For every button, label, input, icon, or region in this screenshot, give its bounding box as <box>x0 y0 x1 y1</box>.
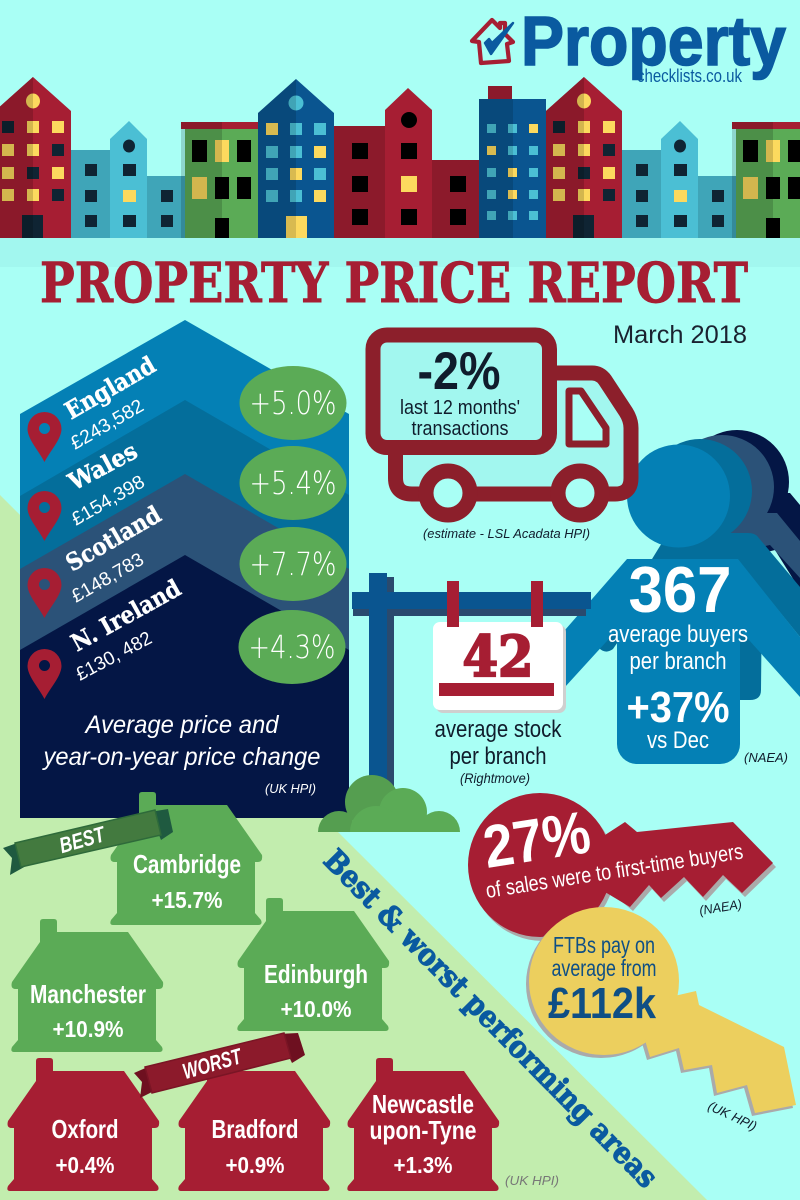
band: Scotland <box>20 474 349 700</box>
panel caption <box>42 711 321 771</box>
price: Scotland: £148,783 <box>68 549 148 607</box>
truck front wheel <box>558 471 602 515</box>
house: Cambridge <box>110 792 262 925</box>
key caption: of sales were to first-time buyers <box>484 838 745 903</box>
ribbon: WORST <box>134 1033 305 1098</box>
person 4 <box>685 430 800 590</box>
stock caption: per branch <box>450 743 546 770</box>
stock number: 42 <box>462 624 534 690</box>
ground band <box>0 238 800 267</box>
source: UK HPI key: (UK HPI) <box>706 1098 759 1134</box>
key shadow <box>471 797 776 941</box>
house: Oxford: +0.4% <box>56 1152 114 1178</box>
label: England: England <box>60 350 161 425</box>
panel caption: Average price and <box>84 711 280 739</box>
people group: average buyers <box>565 430 800 764</box>
truck stat text: -2% <box>418 342 500 401</box>
stock caption: average stock <box>434 716 562 743</box>
house: Newcastle upon-Tyne: Newcastle <box>372 1089 474 1119</box>
truck window <box>569 391 606 444</box>
house: Edinburgh: Edinburgh <box>264 959 368 989</box>
blue tower with chimney <box>479 86 546 238</box>
house: Bradford: +0.9% <box>226 1152 284 1178</box>
key shadow <box>526 910 793 1116</box>
pin: Scotland <box>28 568 62 618</box>
badge: +7.7%: +7.7% <box>250 545 336 583</box>
house: Newcastle upon-Tyne <box>347 1058 499 1191</box>
panel caption: year-on-year price change <box>42 743 321 771</box>
badge: +5.4%: +5.4% <box>250 464 336 502</box>
truck rear wheel <box>426 471 470 515</box>
buyers stat text <box>608 553 748 754</box>
house: Manchester <box>11 919 163 1052</box>
house: Newcastle upon-Tyne: upon-Tyne <box>370 1115 476 1145</box>
truck stat text: last 12 months' <box>400 397 520 419</box>
truck cab and chassis <box>396 373 631 494</box>
yellow key <box>529 907 796 1113</box>
truck stat text: transactions <box>412 418 508 440</box>
pin: N. Ireland <box>28 649 62 699</box>
green diagonal background area <box>0 495 707 1200</box>
source: UK HPI: (UK HPI) <box>265 781 316 796</box>
source: Rightmove: (Rightmove) <box>460 770 530 786</box>
badge: +7.7% <box>240 527 346 601</box>
house: Manchester: Manchester <box>30 979 146 1009</box>
key caption: FTBs pay on <box>553 932 655 958</box>
key caption <box>552 932 656 981</box>
truck box <box>373 335 550 448</box>
badge: +4.3%: +4.3% <box>248 628 336 666</box>
right group of buildings <box>546 77 800 238</box>
badge: +5.0% <box>240 366 346 440</box>
sign board <box>433 622 563 710</box>
house: Bradford: Bradford <box>212 1114 298 1144</box>
key: FTB price <box>526 907 796 1134</box>
house: Newcastle upon-Tyne: +1.3% <box>394 1152 452 1178</box>
band: England <box>20 320 349 700</box>
key caption: average from <box>552 955 656 981</box>
house: Cambridge: +15.7% <box>152 887 222 913</box>
sign post <box>352 573 591 808</box>
label: N. Ireland: N. Ireland <box>66 573 186 657</box>
buyers stat text: vs Dec <box>647 727 709 754</box>
truck stat text <box>400 342 520 440</box>
pin: Wales <box>28 491 62 541</box>
ribbon: WORST: WORST <box>180 1043 245 1084</box>
house: Bradford <box>178 1058 330 1191</box>
person 3 <box>670 435 800 578</box>
house: Cambridge: Cambridge <box>133 849 241 879</box>
house: Oxford: Oxford <box>52 1114 118 1144</box>
house: Edinburgh <box>237 898 389 1031</box>
buyers stat text: per branch <box>630 648 726 675</box>
key stat: £112k: £112k <box>548 979 656 1028</box>
left group of buildings <box>0 77 258 238</box>
sign hangers <box>447 581 543 627</box>
key stat: 27%: 27% <box>479 798 595 881</box>
key: first-time buyers share <box>468 793 776 941</box>
ribbon: BEST: BEST <box>56 821 109 858</box>
badge: +4.3% <box>238 610 346 684</box>
pin: England <box>28 412 62 462</box>
badge: +5.0%: +5.0% <box>250 384 336 422</box>
stock caption <box>434 716 562 770</box>
band: Wales <box>20 400 349 700</box>
source: estimate: (estimate - LSL Acadata HPI) <box>423 526 590 541</box>
logo <box>472 2 786 86</box>
price: N. Ireland: £130, 482 <box>72 628 156 685</box>
blue building with gable <box>258 79 334 238</box>
house: Oxford <box>7 1058 159 1191</box>
date: March 2018 <box>613 321 747 349</box>
sign underline bar <box>439 683 554 696</box>
source: UK HPI areas: (UK HPI) <box>505 1173 559 1188</box>
buyers stat text: 367 <box>628 553 732 626</box>
badge: +5.4% <box>240 446 346 520</box>
logo icon: house with tick <box>472 20 513 63</box>
buyers stat text: +37% <box>626 683 730 732</box>
ribbon: BEST <box>3 809 173 875</box>
street of houses illustration <box>0 77 800 238</box>
sign post shadow <box>353 577 586 812</box>
price: Wales: £154,398 <box>68 472 149 530</box>
house: Manchester: +10.9% <box>52 1016 124 1042</box>
person 1 (front) <box>565 444 800 764</box>
red key <box>468 793 773 937</box>
for-sale sign <box>352 573 591 812</box>
bush <box>318 775 460 832</box>
logo subline: checklists.co.uk <box>637 66 743 86</box>
source: NAEA key: (NAEA) <box>698 896 743 918</box>
panel: regional average prices <box>20 320 349 818</box>
buyers stat text: average buyers <box>608 621 748 648</box>
house: Edinburgh: +10.0% <box>280 996 352 1022</box>
red terrace <box>334 88 479 238</box>
person 2 <box>598 439 800 700</box>
delivery truck <box>373 335 631 541</box>
price: England: £243,582 <box>67 396 148 454</box>
label: Scotland: Scotland <box>60 499 166 577</box>
sign board shadow <box>436 625 566 713</box>
label: Wales: Wales <box>62 436 142 497</box>
band: N. Ireland <box>20 555 349 818</box>
source: NAEA buyers: (NAEA) <box>744 750 788 765</box>
